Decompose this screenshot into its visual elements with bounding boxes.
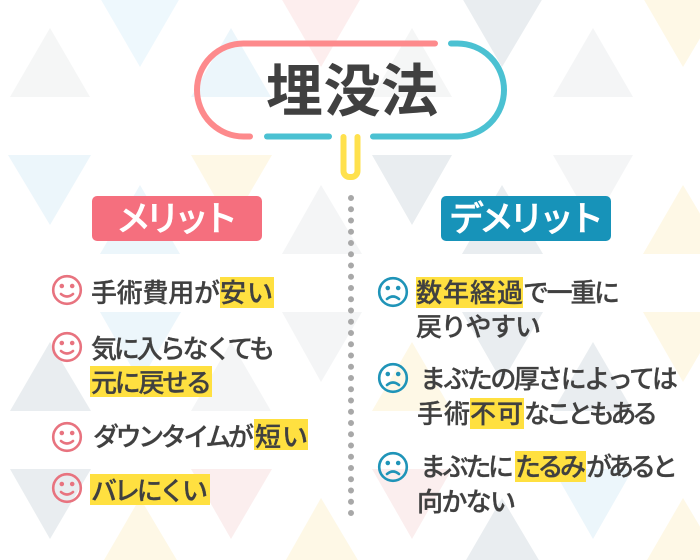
demerit item: eyelid thickness: 手術 <box>417 399 470 429</box>
title frame: rounded pill with yellow tail <box>197 44 504 177</box>
demerit item: sagging: まぶたに <box>420 452 514 482</box>
icon: frown <box>379 278 407 306</box>
icon: smile <box>53 474 81 502</box>
icon: smile <box>53 333 81 361</box>
demerit item: sagging <box>379 451 678 517</box>
merit item: cost: 安い <box>220 278 273 308</box>
icon: frown <box>379 364 407 392</box>
icon: frown <box>379 453 407 481</box>
demerit item: eyelid thickness: なこともある <box>524 399 658 429</box>
center dotted divider <box>348 198 354 524</box>
demerit item: relapse <box>379 277 620 342</box>
merit item: cost <box>53 276 274 308</box>
demerit item: sagging: たるみ <box>515 452 586 482</box>
merit item: reversible <box>53 333 275 398</box>
title: 埋没法 <box>266 60 438 124</box>
heading: demerit: デメリット <box>449 200 604 239</box>
merit item: hard to notice <box>53 474 210 506</box>
merit item: reversible: 気に入らなくても <box>91 334 275 364</box>
merit item: cost: 手術費用が <box>91 278 220 308</box>
icon: smile <box>53 423 81 451</box>
merit item: downtime <box>53 419 308 452</box>
merit item: hard to notice: バレにくい <box>91 476 208 506</box>
demerit item: relapse: 戻りやすい <box>416 312 541 342</box>
demerit item: sagging: 向かない <box>417 487 516 517</box>
demerit item: eyelid thickness: まぶたの厚さによっては <box>420 364 678 394</box>
icon: smile <box>53 276 81 304</box>
demerit item: relapse: 数年経過 <box>416 278 523 308</box>
demerit item: eyelid thickness: 不可 <box>470 399 523 429</box>
heading: merit <box>92 196 262 241</box>
merit item: reversible: 元に戻せる <box>91 368 212 398</box>
demerit item: sagging: があると <box>586 452 678 482</box>
merit item: downtime: 短い <box>255 422 308 452</box>
merit item: downtime: ダウンタイムが <box>93 422 254 452</box>
demerit item: eyelid thickness <box>379 364 678 429</box>
heading: merit: メリット <box>116 200 238 239</box>
demerit item: relapse: で一重に <box>523 278 620 308</box>
